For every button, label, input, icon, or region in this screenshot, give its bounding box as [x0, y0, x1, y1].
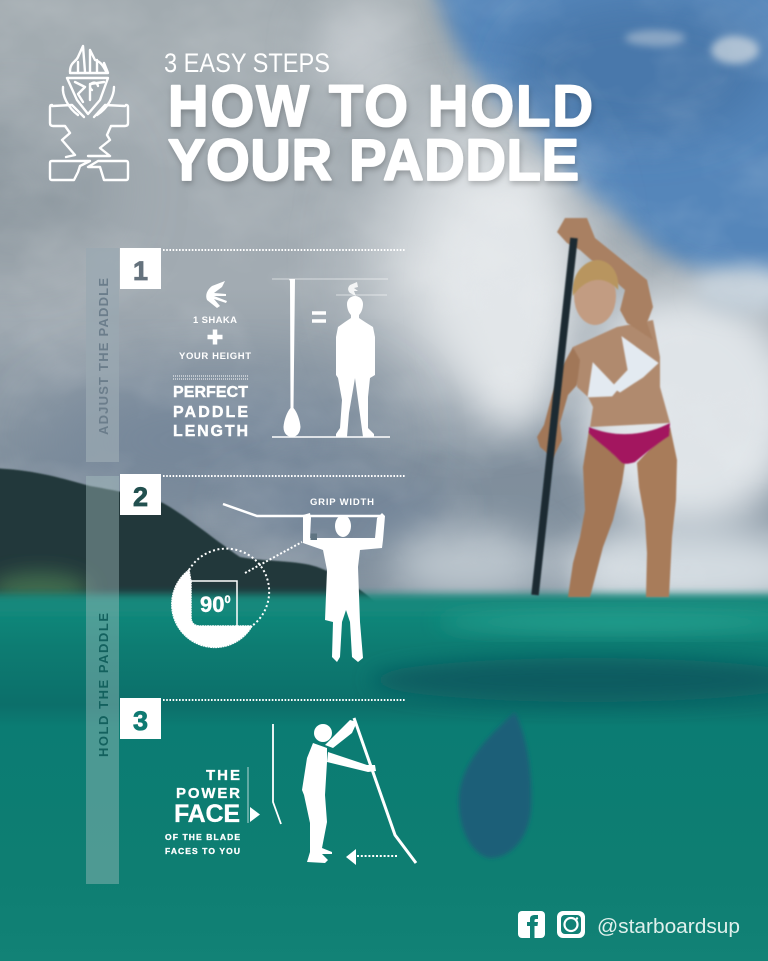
paddler lower arm	[537, 347, 580, 458]
step 1: formula text	[173, 281, 251, 440]
side bar: adjust the paddle	[86, 248, 119, 462]
icon: plus	[208, 330, 222, 344]
icon: shaka hand	[206, 281, 227, 308]
number badge 2: 2	[133, 482, 148, 512]
paddle silhouette	[284, 279, 300, 437]
standing man silhouette	[336, 296, 375, 437]
label: 90 degrees: 90	[200, 592, 224, 617]
label: grip width: GRIP WIDTH	[310, 497, 374, 508]
number badge 1	[120, 248, 161, 289]
icon: facebook	[518, 911, 545, 938]
paddler right leg	[637, 427, 677, 597]
paddling man silhouette	[302, 720, 376, 863]
side bar: adjust the paddle: ADJUST THE PADDLE	[96, 278, 111, 435]
man with arms raised	[303, 513, 385, 662]
bikini top	[588, 337, 658, 397]
step 1: paddle and figure diagram	[272, 279, 390, 437]
handle: starboardsup: @starboardsup	[597, 916, 740, 938]
power face text: FACE	[174, 800, 240, 828]
side bar: hold the paddle	[86, 476, 119, 884]
dotted dividers	[163, 250, 405, 700]
number badge 3	[120, 698, 161, 739]
paddle in use	[354, 718, 416, 863]
step 3: power face	[165, 718, 416, 865]
social footer	[518, 911, 740, 938]
logo: tiki	[50, 46, 128, 180]
headline: YOUR PADDLE	[168, 128, 579, 193]
subtitle: 3 easy steps: 3 EASY STEPS	[164, 48, 330, 78]
label: 90 degrees: 0	[224, 594, 231, 606]
number badge 3: 3	[133, 706, 148, 736]
direction arrow	[346, 849, 356, 865]
dotted rule	[173, 376, 248, 379]
number badge 1: 1	[133, 256, 148, 286]
dotted leader	[245, 542, 302, 573]
paddler head	[574, 267, 616, 325]
photo: paddler on board	[459, 218, 677, 858]
label: 1 shaka: 1 SHAKA	[193, 315, 237, 326]
power face text: POWER	[176, 785, 240, 802]
headline: HOW TO HOLD	[168, 74, 593, 139]
measure lines	[272, 279, 388, 295]
small shaka on head	[348, 282, 358, 296]
title	[164, 48, 593, 193]
step 2: grip width	[172, 497, 385, 662]
elbow angle marker	[311, 534, 316, 540]
power face text	[165, 767, 240, 856]
paddler hair	[573, 260, 618, 296]
label: perfect paddle length: LENGTH	[173, 423, 248, 440]
paddler raised arm	[557, 218, 653, 340]
paddle side view	[273, 724, 281, 824]
label: perfect paddle length	[173, 384, 248, 440]
vertical rule	[247, 767, 249, 823]
dotted arrow line	[357, 855, 398, 857]
bikini bottom	[589, 423, 670, 464]
headline	[168, 74, 593, 193]
power face text: FACES TO YOU	[165, 846, 240, 856]
label: perfect paddle length: PERFECT	[173, 384, 248, 401]
90 degree circle callout	[172, 549, 269, 647]
paddle shaft	[535, 238, 574, 595]
paddler torso	[573, 320, 670, 427]
power face text: OF THE BLADE	[165, 832, 240, 842]
label: your height: YOUR HEIGHT	[179, 351, 251, 362]
power face text: THE	[206, 767, 240, 784]
number badge 2	[120, 474, 161, 515]
paddler left leg	[568, 430, 625, 597]
icon: instagram	[557, 911, 585, 938]
equals sign	[312, 313, 326, 321]
label: perfect paddle length: PADDLE	[173, 404, 248, 421]
paddle overhead	[223, 504, 382, 516]
pointer arrow	[250, 807, 260, 822]
underwater paddle blade	[459, 712, 531, 858]
side bar: hold the paddle: HOLD THE PADDLE	[96, 613, 111, 757]
